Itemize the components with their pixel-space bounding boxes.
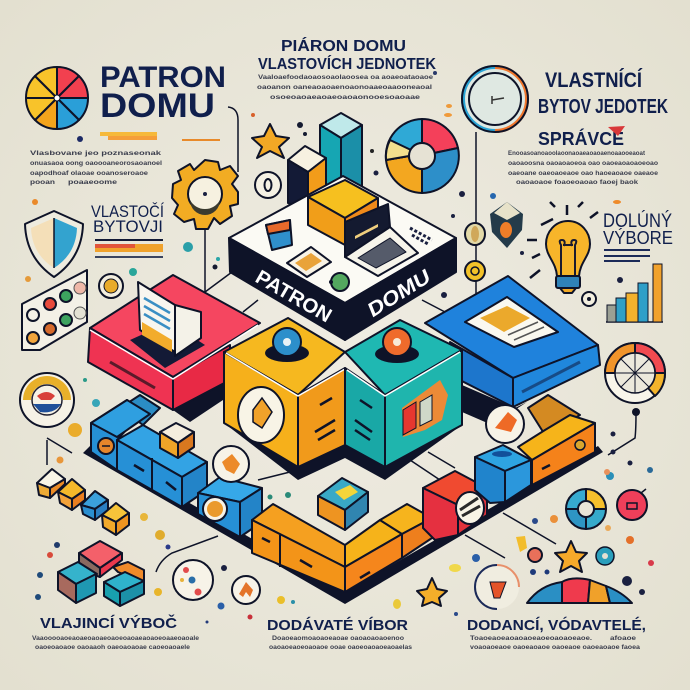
- connector lines: [47, 107, 636, 572]
- top centre text: osoeoaoaeaoaeoaoaonooesoaoaae: [270, 94, 421, 101]
- top centre heading: [258, 36, 436, 73]
- red block shadow: [173, 380, 226, 422]
- yellow box on platform: [308, 180, 378, 245]
- badge on yellow cube: [238, 387, 284, 443]
- icon: small rings lower right: [516, 536, 614, 565]
- icon: polygon gem: [490, 202, 523, 248]
- red cube: [423, 471, 487, 540]
- small ring left: [99, 274, 123, 298]
- icon: small ring: [255, 172, 281, 198]
- bar chart: [606, 264, 663, 322]
- right text block: [508, 150, 658, 186]
- red block: [88, 275, 260, 410]
- bottom right heading and text: [467, 616, 646, 651]
- right text block: oaoaoaoe foaoeoaoao faoej baok: [516, 179, 638, 186]
- bottom left heading and text: [32, 614, 199, 651]
- left sub heading: [91, 202, 164, 258]
- laptop: [345, 204, 418, 276]
- right sub heading: VÝBORE: [603, 228, 673, 248]
- platform label: DOMU: DOMU: [366, 265, 433, 323]
- top centre heading: PIÁRON DOMU: [281, 36, 406, 55]
- donut chart top: [386, 119, 459, 193]
- top centre text: [257, 74, 433, 101]
- bottom right heading and text: Toaoeaoeaoaoaoeaoeoaoaoeaoe.: [470, 635, 592, 642]
- icon: star bottom: [417, 578, 447, 606]
- intro text block: oapodhoaf olaoae ooanoseroaoe: [30, 170, 148, 177]
- small glyph marks on platform: [410, 228, 432, 244]
- bottom right heading and text: afoaoe: [610, 635, 636, 642]
- badge on red cube: [456, 492, 484, 524]
- main title: DOMU: [100, 87, 215, 125]
- document on red block: [130, 282, 205, 368]
- right heading: [538, 69, 668, 149]
- small loose cubes: [37, 469, 129, 535]
- small orange cube on blue row: [160, 423, 194, 458]
- icon: star top: [252, 124, 289, 158]
- right heading: VLASTNÍCÍ: [545, 69, 643, 92]
- cube cluster: [58, 541, 144, 606]
- intro text block: [30, 150, 162, 186]
- badge on blue row right: [203, 497, 227, 521]
- icon: donut lower right: [566, 489, 606, 529]
- bottom left heading and text: Vaaooooaoeaoaeoaoaeoaoeoaoaeaoaoeoaaeoaoale: [32, 635, 199, 642]
- badge on blue row centre: [213, 446, 249, 482]
- blue cube right: [475, 445, 531, 503]
- icon: house circle: [232, 576, 260, 604]
- blue block right: [425, 276, 600, 407]
- intro text block: onuasaoa oong oaoooaneorosaoanoel: [30, 160, 162, 167]
- left sub heading: VLASTOČÍ: [91, 202, 164, 221]
- badge on orange step: [486, 405, 524, 443]
- intro text block: pooan: [30, 179, 55, 186]
- scattered confetti dots: [25, 71, 654, 624]
- title accent bar: [77, 132, 220, 142]
- orange block row: [252, 504, 432, 592]
- green knob on platform: [329, 273, 349, 291]
- right text block: oaoaoosna oaoaoaoeoa oao oaoeaoaoaoeoao: [508, 160, 658, 167]
- blue knob: [265, 328, 309, 362]
- right text block: Enooasoanoaoolaoonaoaeaoaoaenoaaooeaoat: [508, 150, 646, 157]
- icon: gear: [172, 160, 238, 229]
- main title: PATRON: [100, 61, 226, 94]
- emblem on teal cube: [402, 380, 448, 437]
- bottom left heading and text: oaoeoaoaoe oaoaaoh oaeoaoaoae caoeoaoaele: [35, 644, 190, 651]
- top centre text: Vaaloaefoodaoaosoaolaoosea oa aoaeoataoaoe: [258, 74, 433, 81]
- intro text block: Vlasbovane jeo poznaseonak: [30, 150, 162, 157]
- platform label: PATRON: PATRON: [252, 266, 335, 327]
- teal cube: [345, 320, 462, 467]
- icon: rainbow dome: [527, 578, 632, 603]
- bottom centre heading and text: [267, 617, 412, 651]
- orange step right: [518, 395, 595, 485]
- top centre heading: VLASTOVÍCH JEDNOTEK: [258, 54, 436, 73]
- intro text block: poaaeoome: [68, 179, 118, 186]
- icon: red circle: [617, 489, 647, 520]
- right sub heading: DOLÚNÝ: [603, 210, 672, 232]
- orange knob: [375, 328, 419, 363]
- icon: lens circle: [462, 66, 528, 132]
- base platform rim: [83, 446, 603, 604]
- main title: [100, 61, 226, 125]
- right heading: SPRÁVCE: [538, 128, 624, 149]
- top centre text: oaoanon oaneaoaoaenoaonoaaeoaaooneaoal: [257, 84, 432, 91]
- icon: compass circle: [475, 565, 519, 609]
- bottom left heading and text: VLAJINCÍ VÝBOČ: [40, 614, 177, 632]
- document on blue block: [465, 297, 558, 347]
- icon: bulb: [527, 202, 598, 293]
- colour swatch card: [22, 270, 87, 350]
- bottom right heading and text: voaoaoeaoe oaoeaoaoe oaoeaoe oaoeaoaoe faoea: [470, 644, 640, 651]
- badge on blue row left: [98, 438, 114, 454]
- right sub heading: [603, 210, 673, 261]
- platform shadow under cubes: [224, 400, 462, 480]
- blue block shadow: [462, 385, 527, 425]
- bottom centre heading and text: Doaoeaomoaoaoeaoae oaoaoaoaoenoo: [272, 635, 404, 642]
- top black platform: [229, 176, 456, 340]
- blue step row: [91, 395, 262, 537]
- bottom centre heading and text: DODÁVATÉ VÍBOR: [267, 617, 408, 634]
- icon: round emblem left: [20, 373, 74, 427]
- icon: wheel chart: [605, 343, 665, 403]
- right text block: oaeoane oaeoaoeaoe oao haoeaoaoe oaeaoe: [508, 170, 658, 177]
- dark and orange bar: [288, 146, 326, 210]
- icon: connector coins: [465, 223, 596, 306]
- logo pie chart: [26, 67, 88, 129]
- icon: shield: [25, 211, 83, 277]
- tall teal bar: [320, 113, 362, 195]
- bottom right heading and text: DODANCÍ, VÓDAVTELÉ,: [467, 616, 646, 634]
- bottom centre heading and text: oaoaoeaoeoaoaoe ooae oaoeoaoaoeaoaelas: [269, 644, 412, 651]
- small chest on platform: [266, 220, 292, 250]
- left sub heading: BYTOVJI: [93, 217, 163, 236]
- icon: star right: [555, 541, 587, 572]
- icon: confetti circle: [173, 560, 213, 600]
- small picture on platform: [287, 247, 331, 277]
- central small cube: [318, 478, 368, 530]
- yellow cube: [224, 318, 345, 467]
